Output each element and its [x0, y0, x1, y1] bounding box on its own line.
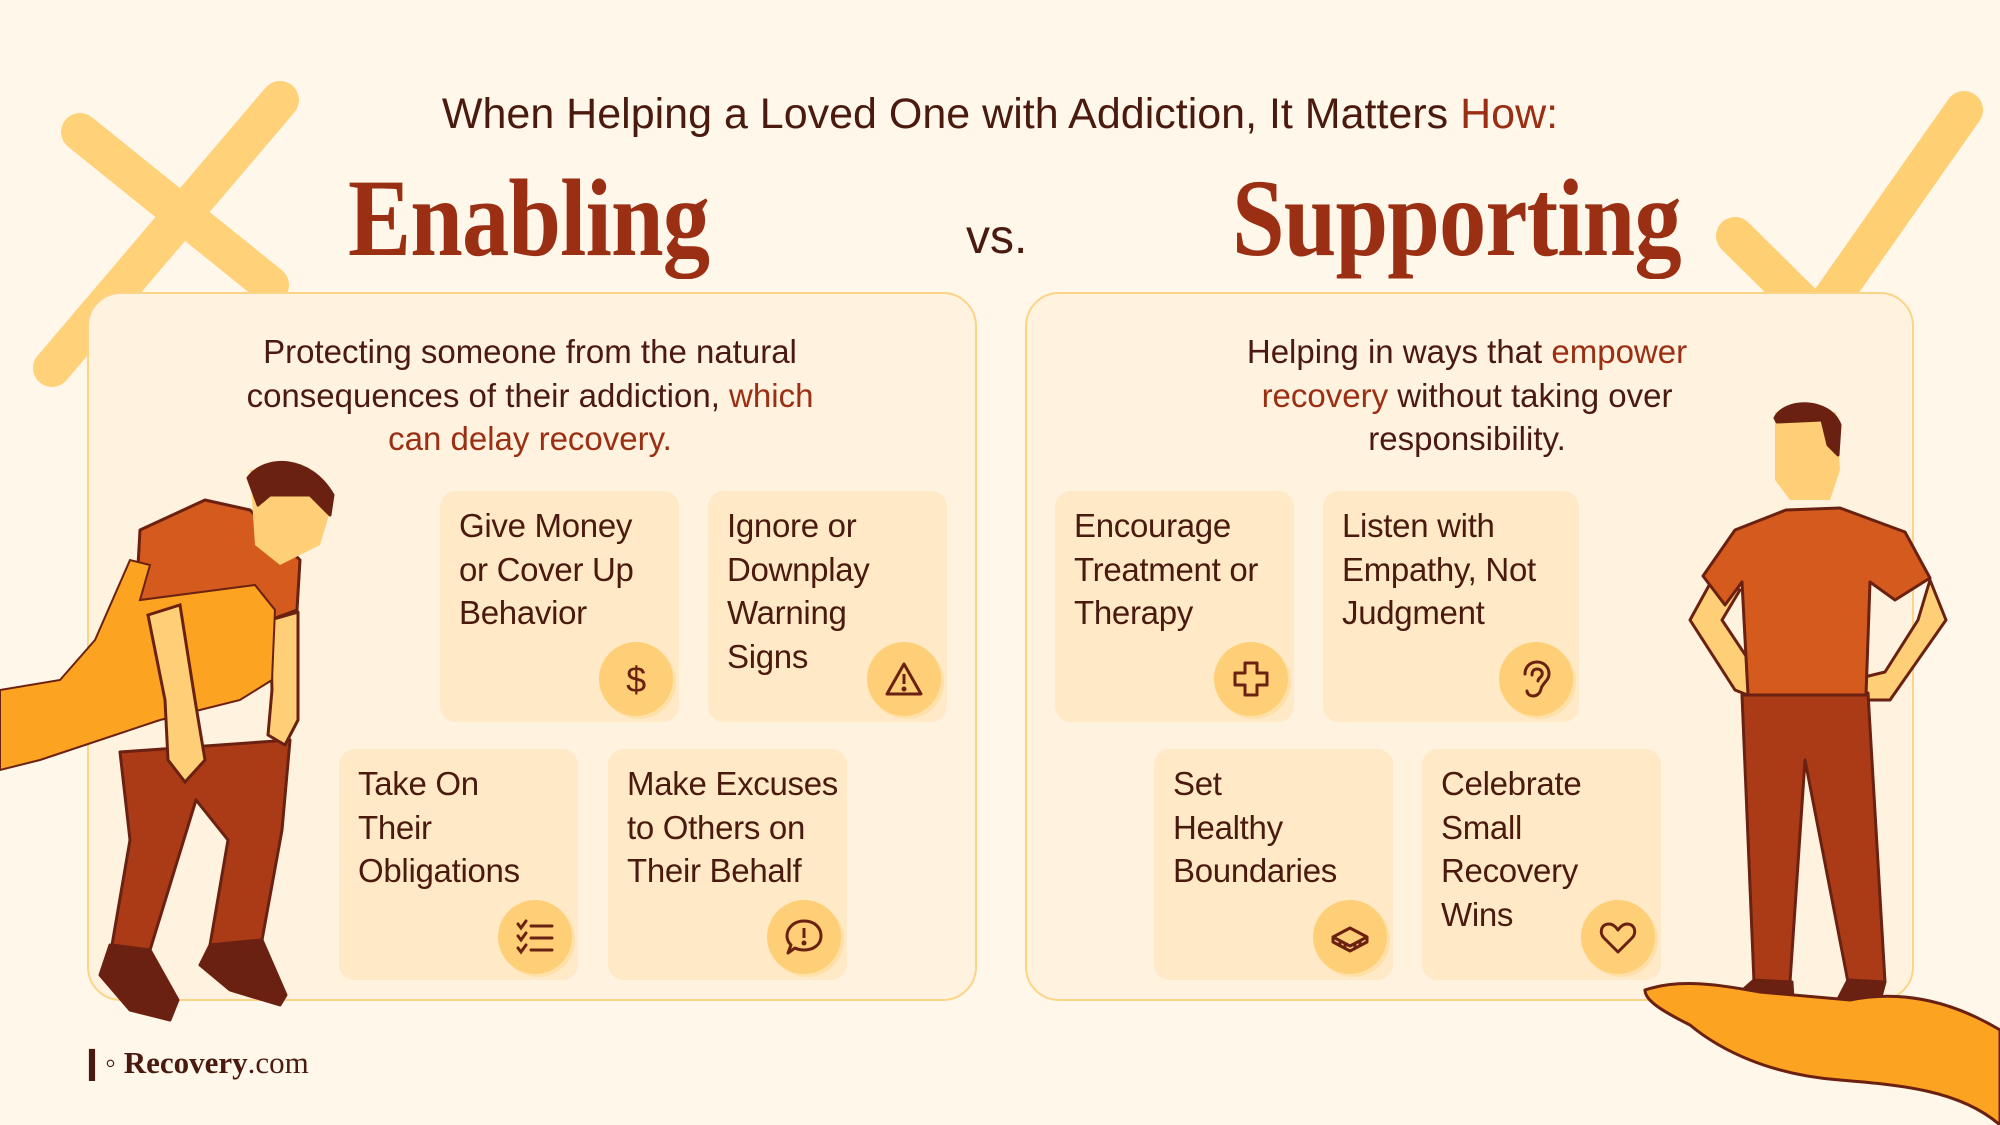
title: When Helping a Loved One with Addiction, It Matters How: — [442, 90, 1558, 138]
illustration: supported man standing on hand — [1644, 402, 2000, 1125]
text: supporting definition: responsibility. — [1368, 420, 1566, 457]
card: take on obligations: Their — [358, 808, 432, 846]
icon: dollar — [599, 642, 673, 716]
card: set boundaries: Healthy — [1173, 808, 1283, 846]
heading: Enabling: Enabling — [348, 157, 709, 279]
card: celebrate wins: Celebrate — [1441, 765, 1581, 802]
card: make excuses: Make Excuses — [627, 765, 838, 802]
card: give money — [440, 491, 679, 722]
card: encourage treatment: Encourage — [1074, 507, 1231, 544]
panel: supporting — [1025, 292, 1914, 1001]
heading: vs.: vs. — [966, 211, 1027, 264]
card: ignore warning signs — [708, 491, 947, 722]
card: make excuses: to Others on — [627, 808, 805, 846]
card: encourage treatment: Treatment or — [1074, 550, 1258, 588]
icon: medical cross — [1214, 642, 1288, 716]
card: set boundaries: Boundaries — [1173, 852, 1337, 889]
card: take on obligations: Take On — [358, 765, 479, 802]
text: supporting definition: recovery without taking over — [1262, 376, 1672, 414]
text: enabling definition: Protecting someone from the natural — [263, 333, 797, 370]
text: enabling definition: can delay recovery. — [388, 420, 672, 457]
card: set boundaries: Set — [1173, 765, 1222, 802]
card: ignore warning signs: Signs — [727, 638, 808, 674]
card: make excuses: Their Behalf — [627, 852, 801, 889]
card: make excuses — [608, 749, 847, 980]
card: ignore warning signs: Downplay — [727, 550, 870, 588]
logo: ❙◦ Recovery.com — [79, 1045, 309, 1080]
text: enabling definition: consequences of their addiction, which — [247, 376, 813, 414]
icon: check mark — [1716, 91, 1983, 292]
card: set boundaries — [1154, 749, 1393, 980]
icon: speech bubble — [767, 900, 841, 974]
icon: X mark — [33, 81, 299, 387]
card: take on obligations: Obligations — [358, 852, 520, 889]
card: celebrate wins: Recovery — [1441, 852, 1578, 889]
heading: Supporting: Supporting — [1232, 157, 1681, 279]
icon: heart — [1581, 900, 1655, 974]
card: celebrate wins: Wins — [1441, 896, 1513, 932]
card: encourage treatment — [1055, 491, 1294, 722]
card: give money: or Cover Up — [459, 550, 634, 588]
card: give money: Give Money — [459, 507, 632, 544]
text: supporting definition: Helping in ways that empower — [1247, 333, 1687, 370]
card: ignore warning signs: Ignore or — [727, 507, 856, 544]
panel: enabling — [87, 292, 977, 1001]
text: supporting definition — [1247, 333, 1687, 457]
icon: ear — [1499, 642, 1573, 716]
illustration: enabled man held by hand — [0, 460, 334, 1022]
card: celebrate wins — [1422, 749, 1661, 980]
card: celebrate wins: Small — [1441, 808, 1522, 846]
text: enabling definition — [247, 333, 813, 457]
icon: checklist — [498, 900, 572, 974]
card: listen with empathy: Judgment — [1342, 594, 1485, 631]
card: encourage treatment: Therapy — [1074, 594, 1193, 631]
card: listen with empathy — [1323, 491, 1579, 722]
card: take on obligations — [339, 749, 578, 980]
icon: dollar: $ — [626, 659, 646, 699]
icon: warning — [867, 642, 941, 716]
icon: boundary — [1313, 900, 1387, 974]
card: give money: Behavior — [459, 594, 587, 631]
card: ignore warning signs: Warning — [727, 594, 847, 631]
card: listen with empathy: Listen with — [1342, 507, 1495, 544]
card: listen with empathy: Empathy, Not — [1342, 550, 1536, 588]
